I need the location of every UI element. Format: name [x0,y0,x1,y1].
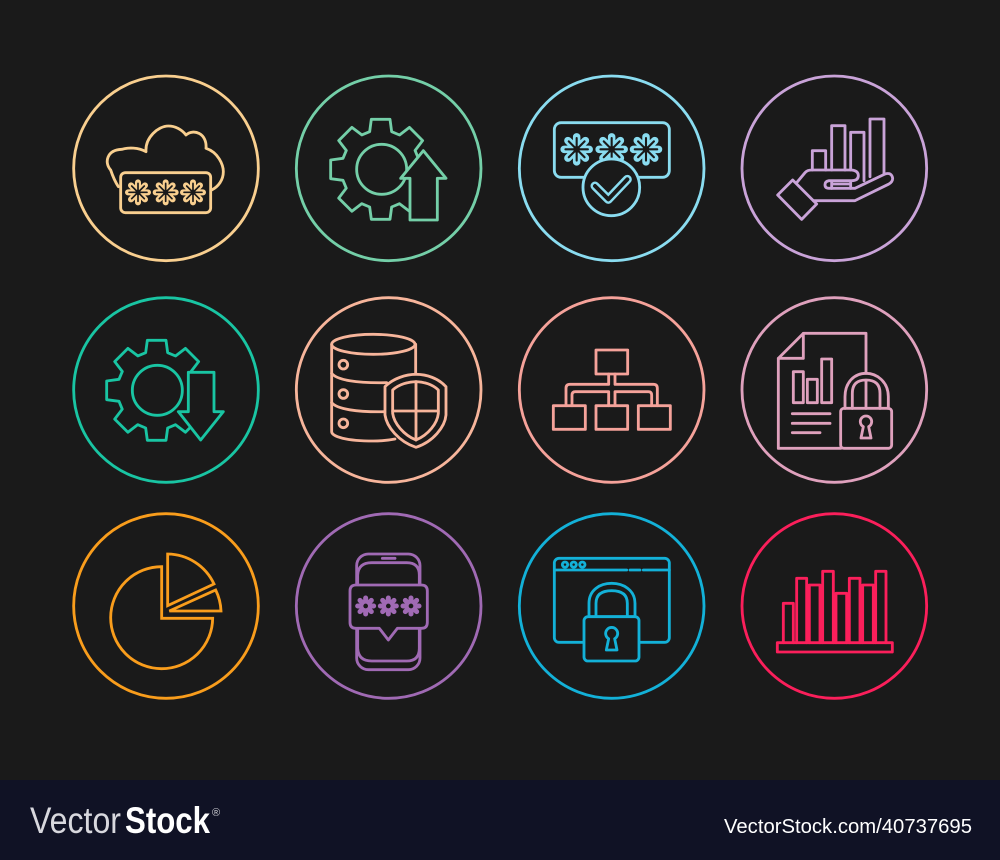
logo wordmark [30,800,220,841]
icon: gear with down arrow [74,298,258,482]
icon: bar chart [742,514,927,698]
icon: hierarchy org chart [519,298,704,482]
icon: browser window with padlock [519,514,704,698]
icon: locked document with chart [742,298,927,482]
icon: smartphone password message [296,514,481,698]
icon: gear with up arrow [296,76,481,261]
footer band [0,780,1000,860]
icon: pie chart [74,514,258,698]
icon: hand holding bar chart [742,76,927,261]
icon: database with shield [296,298,481,482]
logo wordmark: Vector [30,800,121,841]
logo wordmark: Stock [125,800,210,841]
icon: cloud password [74,76,258,261]
icon: password check [519,76,704,261]
logo wordmark: ® [212,807,220,819]
image id text: VectorStock.com/40737695 [724,816,972,838]
